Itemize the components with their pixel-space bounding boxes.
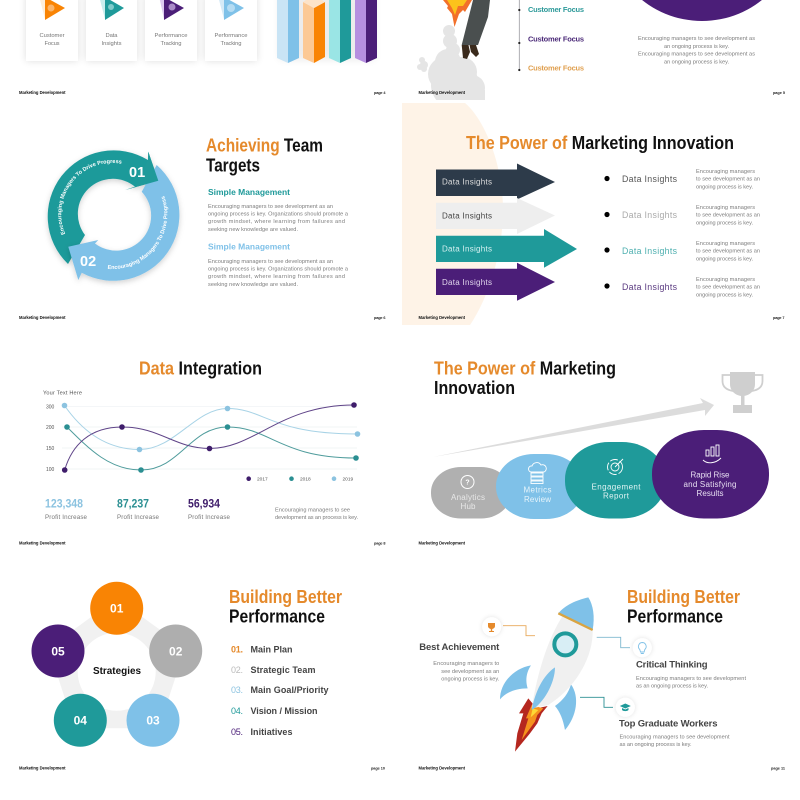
arrow 4: Data Insights [442, 278, 492, 287]
text: Critical Thinking [636, 660, 746, 690]
list: Main Plan [250, 644, 292, 654]
blue arrow 02 [68, 165, 179, 281]
arrow 1: Data Insights [442, 178, 492, 186]
footer: page 5 [773, 91, 785, 95]
list: 01. [231, 644, 243, 654]
text: Best Achievement: ongoing process is key. [441, 676, 500, 682]
footer [418, 315, 784, 320]
node 05: 05 [51, 644, 65, 658]
footer: Marketing Development [418, 765, 466, 770]
text: Critical Thinking: Critical Thinking [636, 660, 708, 670]
footer [418, 90, 785, 95]
legend: 2018 [300, 476, 311, 482]
description: an ongoing process is key. [664, 60, 729, 66]
list row 1: Data Insights [622, 174, 678, 184]
stat 2 [117, 496, 160, 521]
blob: Engagement Report: Report [603, 492, 630, 500]
list row 2: to see development as an [696, 213, 760, 219]
footer: page 10 [371, 766, 385, 770]
list: Initiatives [250, 727, 292, 737]
line chart: Your Text Here [43, 390, 82, 396]
card: Customer Focus: Customer [40, 33, 65, 39]
slide 9: growth blobs [418, 358, 769, 545]
list [231, 644, 328, 737]
node 03: 03 [146, 714, 160, 728]
list: 04. [231, 706, 243, 716]
slide 4: feature cards and columns [19, 0, 386, 95]
note [275, 508, 358, 521]
list row 1 [604, 169, 760, 190]
arrow 1 [436, 164, 555, 200]
text block 1: Encouraging managers to see development as an [208, 204, 333, 210]
footer [418, 765, 785, 770]
note: Encouraging managers to see [275, 508, 350, 514]
text: Best Achievement: Best Achievement [419, 642, 500, 653]
card: Data Insights: Data [106, 33, 118, 39]
stat 1 [45, 496, 88, 521]
smoke cloud [417, 25, 485, 100]
blob: Metrics Review: Metrics [524, 486, 552, 494]
text: Top Graduate Workers [619, 719, 730, 748]
text: Best Achievement: Encouraging managers to [433, 661, 499, 667]
list: Main Goal/Priority [250, 685, 328, 695]
peach background shape [402, 103, 503, 325]
heading: The Power of Marketing Innovation [466, 133, 734, 153]
rising arrow [433, 398, 714, 457]
slide 11: rocket [418, 587, 785, 770]
arrow 2: Data Insights [442, 212, 492, 220]
slide 7: arrows list [402, 103, 784, 325]
footer: page 6 [374, 316, 386, 320]
timeline: Customer Focus [528, 34, 584, 44]
heading: Data Integration [139, 358, 262, 378]
connector teal [580, 697, 613, 707]
node 04: 04 [74, 714, 87, 728]
connector blue [597, 637, 630, 648]
card: Performance Tracking: Tracking [160, 41, 182, 47]
icon: graduation cap [616, 698, 635, 717]
line chart: 100 [46, 467, 55, 473]
curved label blue: Encouraging Managers To Drive Progress [108, 196, 168, 270]
icon: bulb [633, 638, 652, 657]
list row 1: ongoing process is key. [696, 184, 753, 190]
text block 1: growth mindset, where learning from failures and [208, 219, 345, 225]
list row 3: Data Insights [622, 246, 678, 256]
list: 05. [231, 727, 243, 737]
blob: Metrics Review [496, 454, 584, 519]
card: Performance Tracking [145, 0, 197, 61]
text: Critical Thinking: as an ongoing process is key. [636, 684, 708, 690]
list row 4: to see development as an [696, 285, 760, 291]
slide 8: data integration chart [19, 358, 386, 545]
text: Critical Thinking: Encouraging managers to see development [636, 676, 746, 682]
footer: Marketing Development [418, 90, 466, 95]
footer: page 11 [771, 766, 785, 770]
text: Top Graduate Workers: as an ongoing process is key. [620, 742, 692, 748]
list row 4 [604, 277, 760, 298]
blob: Rapid Rise: and Satisfying [684, 480, 736, 489]
text block 1: ongoing process is key. Organizations should promote a [208, 212, 349, 218]
text: Top Graduate Workers: Encouraging managers to see development [620, 734, 730, 740]
slide 10: strategies [19, 582, 385, 770]
footer: Marketing Development [418, 315, 466, 320]
text block 2: Simple Management [208, 242, 290, 252]
list row 3: to see development as an [696, 249, 760, 255]
stat 3: 56,934 [188, 496, 220, 510]
footer: Marketing Development [19, 765, 66, 770]
stat 1: Profit Increase [45, 514, 88, 521]
description: Encouraging managers to see development as [638, 36, 755, 42]
note: development as an process is key. [275, 515, 358, 521]
circular arrow diagram [45, 150, 182, 286]
number 01: 01 [129, 165, 145, 181]
list row 4: Data Insights [622, 282, 678, 292]
list: Vision / Mission [250, 706, 318, 716]
footer: Marketing Development [19, 90, 66, 95]
node 05 [32, 624, 84, 678]
footer: page 7 [773, 316, 784, 320]
list row 3: ongoing process is key. [696, 256, 753, 262]
heading: Performance [229, 606, 325, 626]
heading [206, 136, 323, 176]
card: Performance Tracking 2: Performance [214, 33, 248, 39]
blob: Analytics Hub [431, 467, 511, 518]
pentagon ring [58, 608, 176, 720]
timeline [518, 0, 584, 72]
card: Data Insights: Insights [102, 41, 122, 47]
teal arrow 01 [48, 150, 158, 264]
purple circle [606, 0, 798, 21]
heading: Building Better [229, 587, 342, 607]
list: 02. [231, 665, 243, 675]
3D columns [277, 0, 377, 63]
stat 1: 123,348 [45, 496, 83, 510]
node 04 [54, 694, 107, 747]
blob: Rapid Rise: Results [696, 489, 724, 498]
list: 03. [231, 685, 243, 695]
node 01: 01 [110, 602, 124, 616]
rocket illustration [500, 597, 594, 752]
text block 1: Simple Management [208, 187, 290, 197]
card: Data Insights [86, 0, 137, 61]
list: Strategic Team [250, 665, 316, 675]
line chart: 300 [46, 404, 55, 410]
line chart: 150 [46, 446, 55, 452]
blob: Analytics Hub: Hub [460, 502, 476, 511]
timeline: Customer Focus [528, 64, 584, 72]
icon: trophy [482, 617, 501, 636]
text block 1 [208, 187, 349, 233]
footer [19, 765, 385, 770]
timeline: Customer Focus [528, 5, 584, 14]
list row 2: Data Insights [622, 210, 678, 220]
blob: Rapid Rise [652, 430, 769, 518]
list row 4: ongoing process is key. [696, 292, 753, 298]
footer [19, 90, 386, 95]
footer: page 8 [374, 541, 386, 545]
text block 2 [208, 242, 349, 288]
blob: Rapid Rise: Rapid Rise [690, 470, 730, 480]
card: Performance Tracking 2 [205, 0, 257, 61]
footer [19, 540, 386, 545]
stat 2: 87,237 [117, 496, 149, 510]
footer: page 4 [374, 91, 386, 95]
card: Performance Tracking: Performance [154, 33, 188, 39]
blob: Engagement Report: Engagement [592, 482, 641, 492]
heading: Performance [627, 606, 723, 626]
node 02 [149, 624, 202, 678]
center label: Strategies [93, 666, 141, 677]
legend [246, 476, 354, 482]
heading: Targets [206, 156, 260, 176]
node 01 [90, 582, 143, 635]
heading: Innovation [434, 378, 515, 398]
text: Best Achievement: see development as an [441, 669, 499, 675]
text: Top Graduate Workers: Top Graduate Workers [619, 719, 718, 730]
arrow 3 [436, 229, 577, 268]
description: Encouraging managers to see development as [638, 52, 755, 58]
heading: Building Better [627, 587, 740, 607]
curved label teal: Encouraging Managers To Drive Progress [58, 160, 122, 235]
text block 2: seeking new knowledge are valued. [208, 282, 298, 288]
trophy icon [722, 372, 762, 413]
card: Performance Tracking 2: Tracking [220, 41, 242, 47]
list row 4: Encouraging managers [696, 277, 755, 283]
footer [19, 315, 386, 320]
heading: Achieving Team [206, 136, 323, 156]
slide 5: rocket man and timeline [417, 0, 785, 100]
teal arrow head [125, 152, 158, 190]
line chart [43, 390, 360, 473]
footer: Marketing Development [418, 540, 466, 545]
rocket man flame [443, 0, 472, 27]
connector orange [503, 626, 535, 636]
node 03 [126, 694, 180, 747]
blob: Analytics Hub: Analytics [451, 493, 485, 502]
list row 2 [604, 205, 760, 226]
footer: Marketing Development [19, 315, 66, 320]
heading [434, 358, 616, 398]
text block 2: growth mindset, where learning from failures and [208, 274, 345, 280]
card: Customer Focus: Focus [44, 41, 60, 47]
slide 6: circular arrows [19, 136, 386, 320]
list row 2: Encouraging managers [696, 205, 755, 211]
stat 2: Profit Increase [117, 514, 160, 521]
text block 1: seeking new knowledge are valued. [208, 227, 298, 233]
legend: 2019 [342, 476, 354, 482]
list row 1: to see development as an [696, 177, 760, 183]
card: Customer Focus [26, 0, 78, 61]
text: Best Achievement [419, 642, 500, 682]
number 02: 02 [80, 254, 96, 270]
blob: Metrics Review: Review [524, 495, 551, 504]
list row 1: Encouraging managers [696, 169, 755, 175]
text block 2: Encouraging managers to see development as an [208, 259, 333, 265]
heading [229, 587, 342, 626]
arrow 4 [436, 263, 555, 301]
heading [627, 587, 740, 626]
blob: Analytics Hub: ? [465, 480, 470, 486]
list row 3 [604, 241, 760, 262]
legend: 2017 [257, 476, 268, 482]
stat 3 [188, 496, 231, 521]
arrow 3: Data Insights [442, 244, 492, 254]
heading: The Power of Marketing [434, 358, 616, 378]
stat 3: Profit Increase [188, 514, 231, 521]
text block 2: ongoing process is key. Organizations should promote a [208, 266, 349, 272]
footer: Marketing Development [19, 540, 66, 545]
node 02: 02 [169, 644, 183, 658]
description: an ongoing process is key. [664, 44, 729, 50]
list row 3: Encouraging managers [696, 241, 755, 247]
description [638, 36, 755, 66]
blob: Engagement Report [565, 442, 666, 518]
arrow 2 [436, 198, 555, 234]
line chart: 200 [46, 425, 55, 431]
rocket man trousers and boots [462, 0, 490, 59]
list row 2: ongoing process is key. [696, 220, 753, 226]
